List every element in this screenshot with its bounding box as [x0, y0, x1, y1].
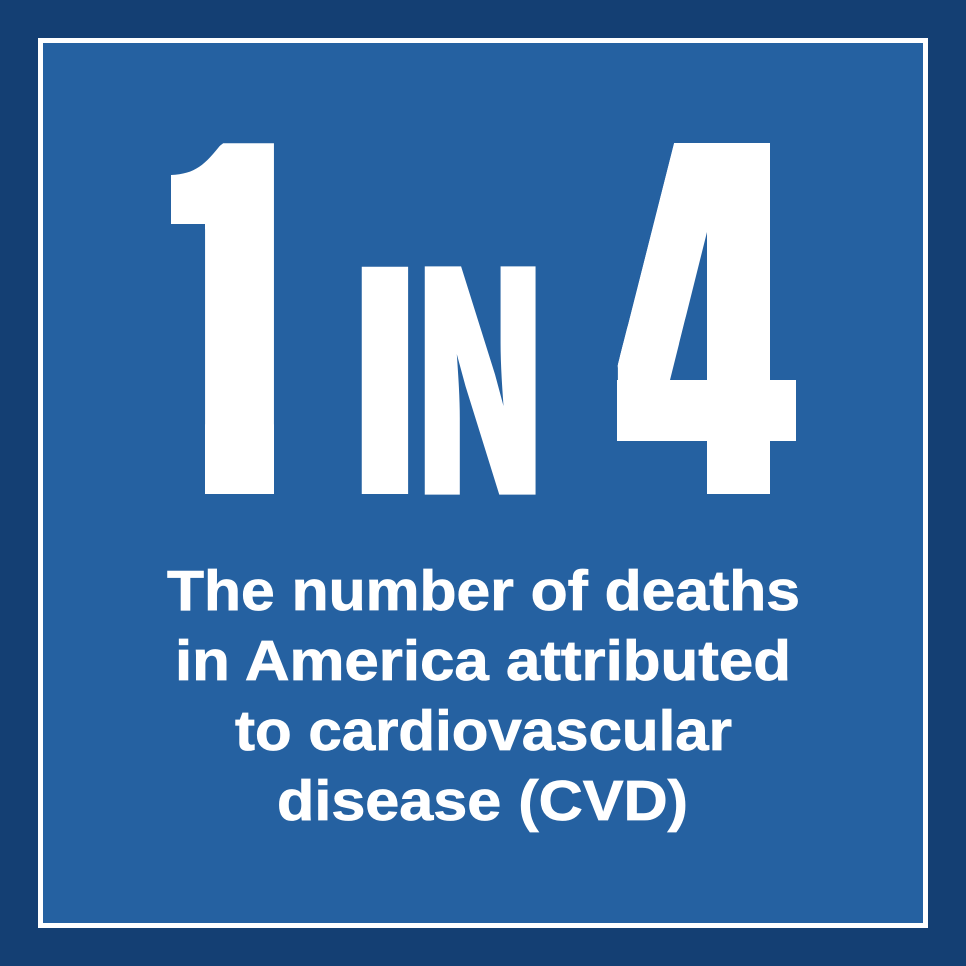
headline: 1 in 4	[171, 143, 796, 495]
word IN: N	[412, 146, 549, 577]
caption line 2: in America attributed	[175, 629, 791, 693]
numeral 4	[617, 143, 796, 494]
caption text	[167, 559, 800, 833]
caption line 1: The number of deaths	[167, 559, 800, 623]
caption line 3: to cardiovascular	[235, 699, 732, 763]
word IN	[340, 142, 549, 582]
caption line 4: disease (CVD)	[277, 769, 688, 833]
word IN: I	[340, 142, 430, 582]
